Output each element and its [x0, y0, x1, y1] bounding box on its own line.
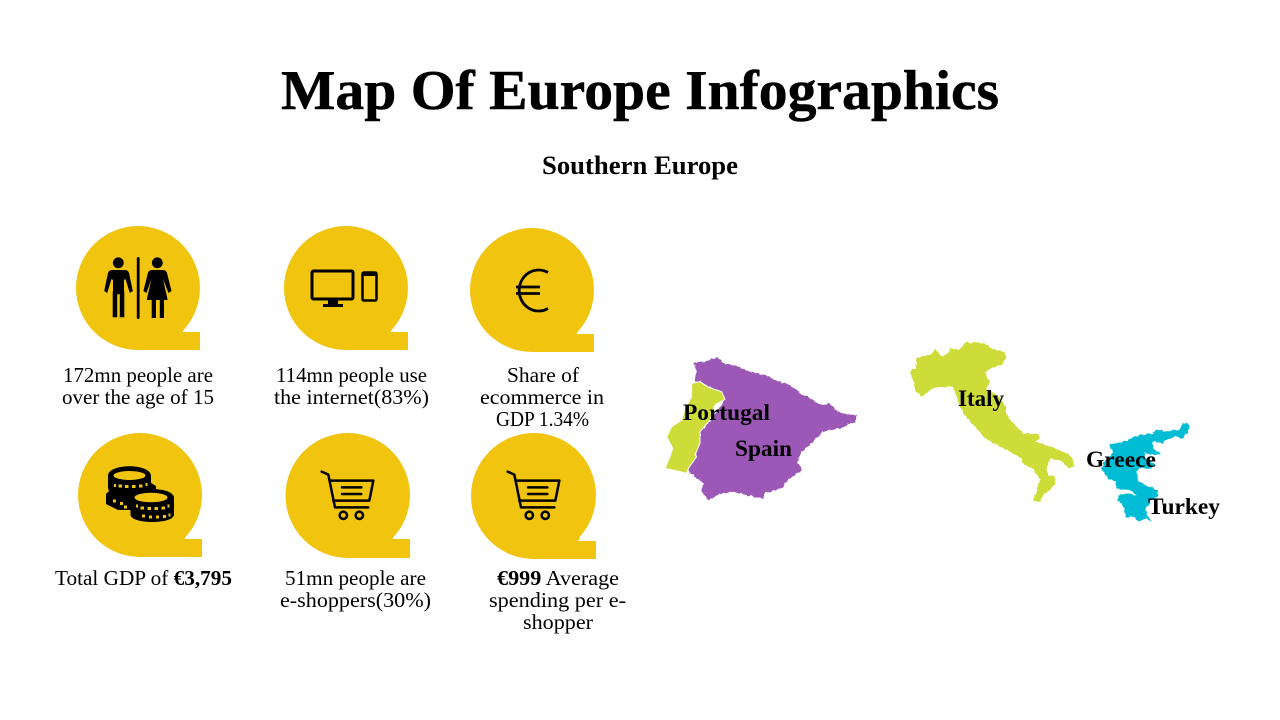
text: average spending: €999 Average: [497, 566, 619, 590]
label: Greece: Greece: [1086, 447, 1156, 472]
text: average spending: [489, 566, 626, 634]
label: Italy: Italy: [958, 386, 1004, 411]
text: e-shoppers: [280, 566, 431, 612]
text: ecommerce share: [480, 363, 605, 431]
icon: coins: [106, 466, 174, 522]
icon: euro: [516, 270, 548, 311]
text: average spending: shopper: [523, 610, 593, 634]
label: Portugal: Portugal: [683, 400, 770, 425]
icon: shopping cart: [508, 472, 559, 519]
badge: [78, 433, 202, 557]
text: internet users: the internet(83%): [274, 385, 429, 409]
panel: ecommerce share: [470, 228, 594, 352]
text: ecommerce share: ecommerce in: [480, 385, 605, 409]
panel: people over 15: [76, 226, 200, 350]
panel: total GDP: [78, 433, 202, 557]
text: ecommerce share: GDP 1.34%: [496, 407, 589, 431]
panel: average spending: [471, 433, 596, 559]
panel: internet users: [284, 226, 408, 350]
badge: [471, 433, 596, 559]
icon: man and woman: [104, 257, 172, 319]
text: internet users: 114mn people use: [276, 363, 427, 387]
text: average spending: spending per e-: [489, 588, 626, 612]
badge: [76, 226, 200, 350]
text: people over 15: over the age of 15: [62, 385, 214, 409]
map: Portugal: [665, 382, 725, 473]
label: Spain: Spain: [735, 436, 792, 461]
map: Spain: [688, 357, 857, 500]
badge: [284, 226, 408, 350]
icon: monitor and phone: [312, 271, 377, 307]
text: total GDP: Total GDP of €3,795: [55, 566, 232, 590]
subtitle: Southern Europe: [542, 151, 738, 180]
icon: shopping cart: [322, 472, 373, 519]
label: Turkey: Turkey: [1148, 494, 1221, 519]
text: e-shoppers: 51mn people are: [285, 566, 426, 590]
badge: [470, 228, 594, 352]
text: people over 15: [62, 363, 214, 409]
title: Map Of Europe Infographics: [281, 60, 999, 122]
text: e-shoppers: e-shoppers(30%): [280, 588, 431, 612]
panel: e-shoppers: [286, 433, 410, 558]
text: ecommerce share: Share of: [507, 363, 579, 387]
badge: [286, 433, 410, 558]
map: Italy: [909, 343, 1074, 502]
text: people over 15: 172mn people are: [63, 363, 213, 387]
map: Greece: [1102, 423, 1189, 522]
text: internet users: [274, 363, 429, 409]
